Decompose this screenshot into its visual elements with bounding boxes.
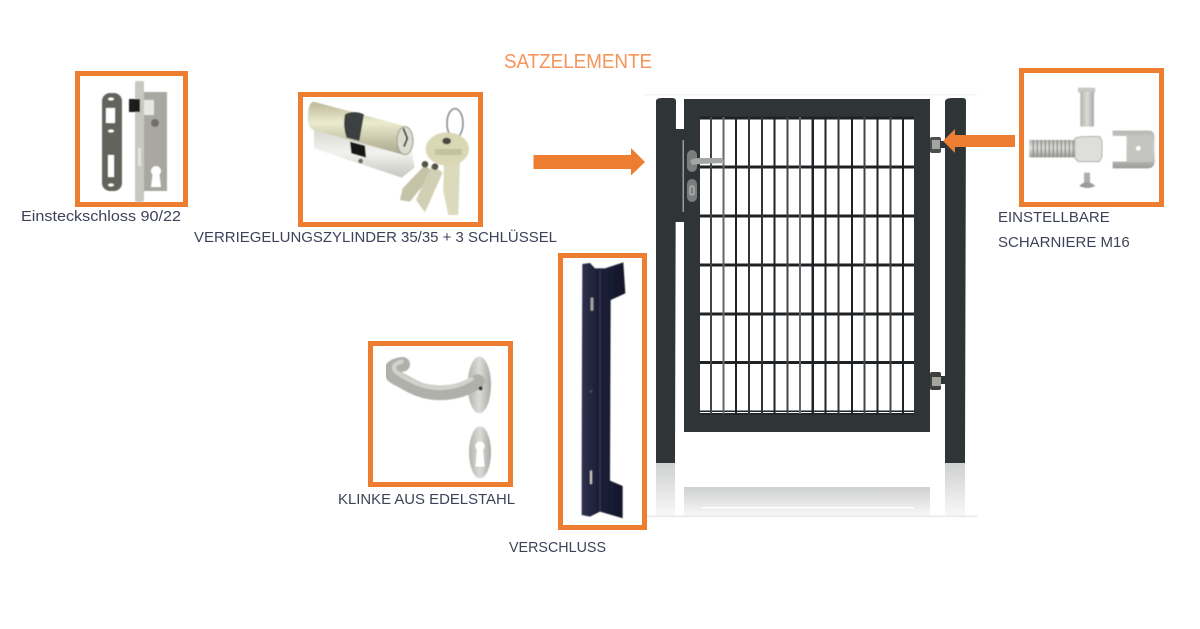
label: mortise lock: Einsteckschloss 90/22 xyxy=(21,208,181,225)
ground reflection xyxy=(644,94,977,517)
right post xyxy=(945,98,966,463)
panel: locking cylinder xyxy=(300,94,480,224)
lock connector xyxy=(675,129,685,222)
frame: mortise lock xyxy=(78,74,186,204)
panel: mortise lock xyxy=(78,74,186,204)
icon: mortise lock body xyxy=(129,81,167,202)
icon: cylinder and keys xyxy=(308,102,469,215)
upper hinge xyxy=(930,137,945,153)
icon: latch profile xyxy=(582,262,625,518)
icon: strike plate xyxy=(102,93,122,191)
arrow: to gate lock xyxy=(534,148,645,176)
gate frame xyxy=(684,99,930,432)
icon: hinge parts xyxy=(1029,88,1155,188)
frame: hinges xyxy=(1022,70,1162,204)
mesh xyxy=(700,116,914,414)
panel: gate illustration xyxy=(644,94,977,517)
frame: latch xyxy=(560,256,644,528)
panel: adjustable hinges xyxy=(1022,70,1162,204)
label: locking cylinder: VERRIEGELUNGSZYLINDER 35/35 + 3 SCHLÜSSEL xyxy=(194,228,557,246)
label: latch: VERSCHLUSS xyxy=(509,539,606,556)
title: SATZELEMENTE xyxy=(504,51,652,73)
label: handle: KLINKE AUS EDELSTAHL xyxy=(338,491,515,508)
label: hinges: SCHARNIERE M16 xyxy=(998,234,1130,251)
icon: lever handle xyxy=(391,357,491,478)
label: hinges: EINSTELLBARE xyxy=(998,209,1110,226)
door handle and lock plate xyxy=(682,140,724,212)
frame: handle xyxy=(370,344,510,484)
frame: locking cylinder xyxy=(300,94,480,224)
lower hinge xyxy=(930,372,945,390)
panel: stainless handle xyxy=(370,344,510,484)
left post xyxy=(656,98,676,463)
arrow: to hinge xyxy=(943,129,1015,153)
panel: gate latch xyxy=(560,256,644,528)
